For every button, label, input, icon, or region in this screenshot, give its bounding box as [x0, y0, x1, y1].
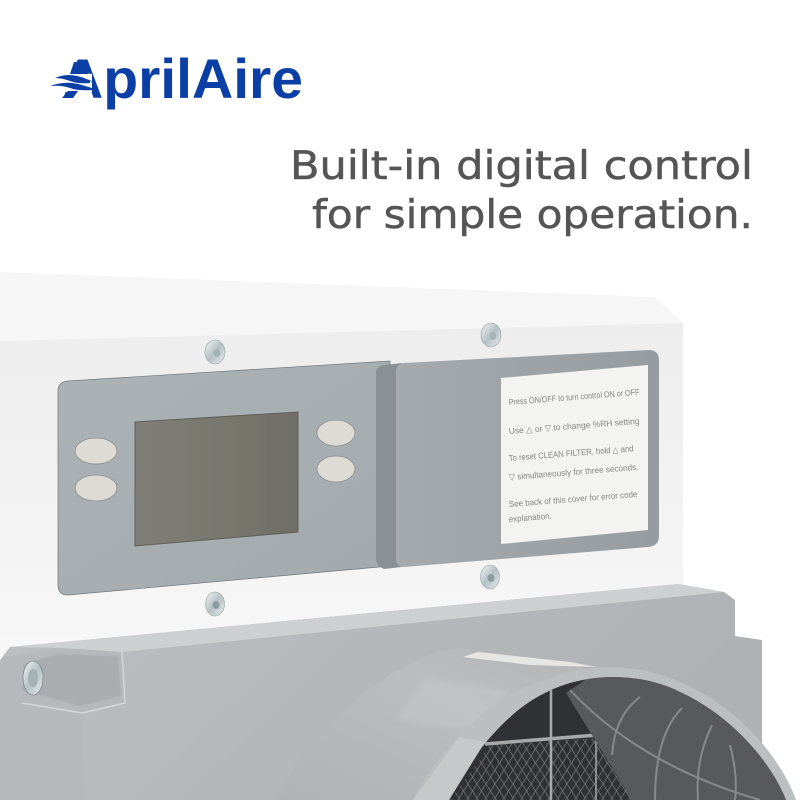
duct inner lip — [413, 737, 485, 800]
screw: housing — [23, 661, 43, 695]
button: down — [317, 456, 355, 482]
screw: lower left — [206, 592, 224, 616]
recess highlight edge — [22, 652, 125, 713]
button: on/off — [75, 438, 117, 464]
duct sticker — [463, 652, 597, 667]
label text: ▽ simultaneously for three seconds. — [508, 462, 639, 482]
label text: Press ON/OFF to turn control ON or OFF — [508, 387, 640, 407]
duct opening — [449, 677, 786, 800]
product: dehumidifier unit — [0, 272, 800, 800]
mounting recess — [0, 648, 125, 800]
screw: top right — [481, 323, 501, 347]
heading — [290, 144, 753, 238]
recess pocket — [22, 654, 121, 706]
instruction label — [501, 365, 648, 544]
duct rim — [413, 667, 796, 800]
housing shoulder — [0, 584, 762, 800]
damper ribs — [570, 690, 760, 800]
label text: To reset CLEAN FILTER, hold △ and — [508, 443, 634, 463]
filter frame bars — [485, 690, 597, 800]
duct collar body — [275, 648, 612, 800]
screw: lower right — [480, 565, 500, 589]
duct highlight — [395, 678, 510, 730]
label text: See back of this cover for error code — [508, 489, 638, 509]
logo: AprilAire: AprilAire — [62, 47, 303, 110]
cover front — [396, 350, 659, 567]
button: up — [317, 420, 355, 446]
control panel plate — [58, 361, 390, 595]
label text: Use △ or ▽ to change %RH setting — [508, 416, 640, 436]
unit top surface — [0, 272, 683, 341]
label text — [508, 387, 640, 524]
unit front face — [0, 323, 683, 680]
screw: top left — [205, 340, 225, 364]
button: mode — [75, 475, 117, 501]
label text: explanation. — [508, 511, 552, 524]
housing top band — [10, 584, 724, 652]
heading: Built-in digital control — [290, 144, 753, 189]
LCD screen — [135, 412, 298, 546]
damper blade — [566, 677, 786, 800]
heading: for simple operation. — [312, 193, 753, 238]
filter mesh — [450, 738, 632, 800]
cover side — [376, 363, 402, 569]
